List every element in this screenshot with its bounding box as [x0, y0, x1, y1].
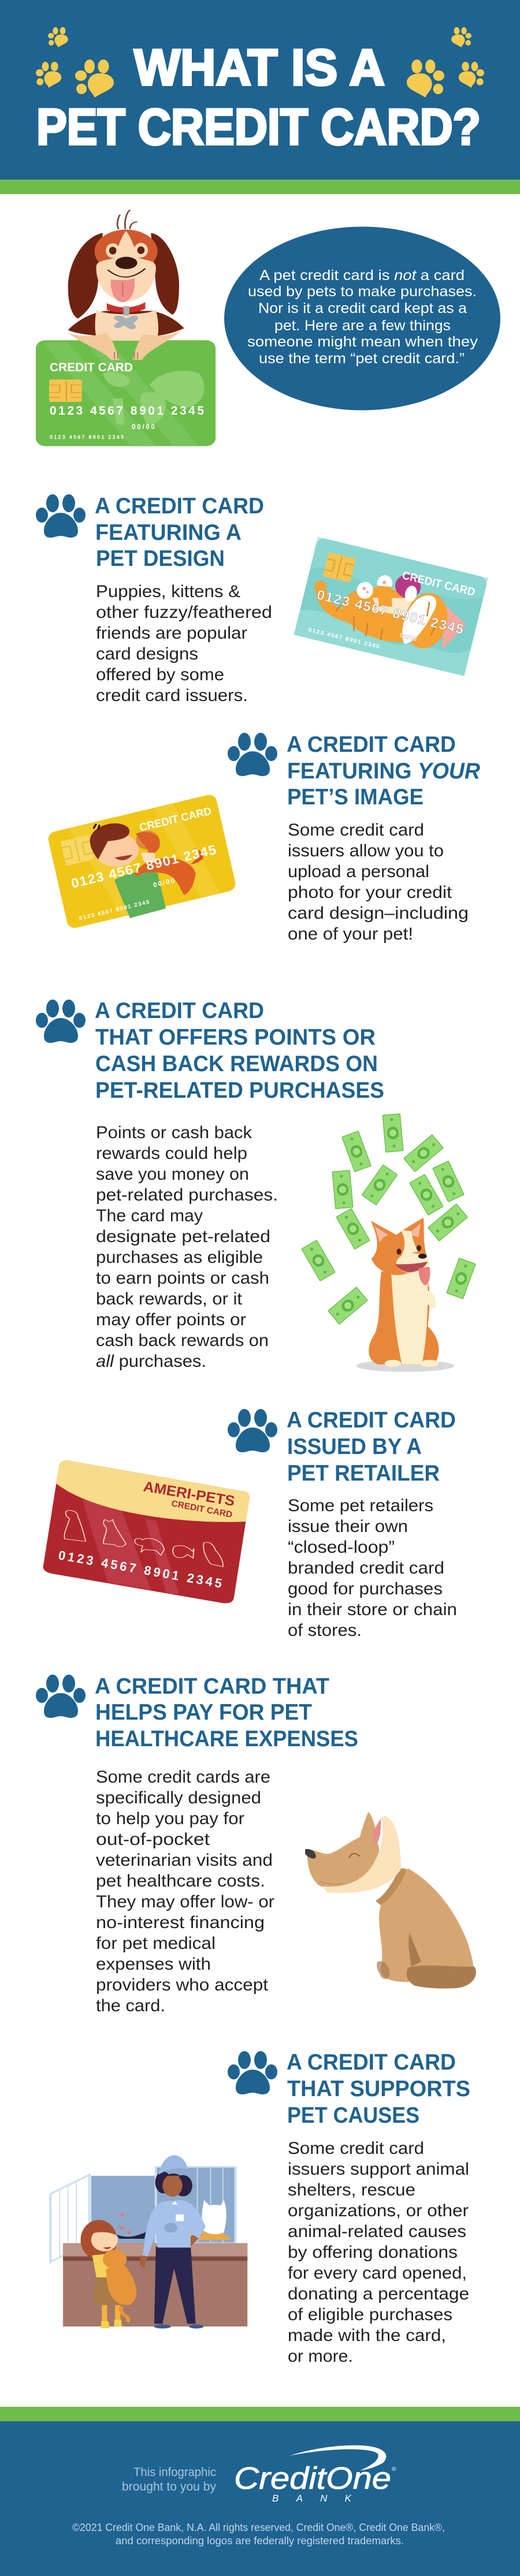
body text	[288, 821, 469, 944]
card labels: 00/00	[132, 423, 155, 431]
card labels: CREDIT CARD	[138, 805, 213, 834]
body text: Some pet retailers	[288, 1496, 433, 1515]
intro callout: A pet credit card is not a card	[259, 267, 465, 284]
body text: issue their own	[288, 1517, 408, 1536]
body text: specifically designed	[96, 1788, 261, 1807]
body text: photo for your credit	[288, 883, 452, 902]
footer: sponsor line: This infographic	[133, 2466, 216, 2479]
body text	[96, 1768, 274, 2015]
body text: all purchases.	[96, 1352, 206, 1371]
title: PET CREDIT CARD?	[36, 98, 481, 155]
heading	[95, 1674, 358, 1751]
heading: PET-RELATED PURCHASES	[95, 1078, 384, 1103]
body text: good for purchases	[288, 1579, 443, 1598]
illustration: teal cat credit card: 0123 4567 8901 2345	[307, 627, 380, 650]
title	[36, 39, 481, 155]
body text: card designs	[96, 644, 198, 663]
body text: rewards could help	[96, 1144, 247, 1163]
illustration: animal shelter	[50, 2155, 247, 2328]
card labels: CREDIT CARD	[50, 361, 133, 374]
heading: CASH BACK REWARDS ON	[95, 1052, 378, 1076]
heading	[287, 2050, 470, 2128]
card labels: 0123 4567 8901 2345	[50, 434, 124, 440]
intro callout: someone might mean when they	[247, 334, 478, 350]
body text: Points or cash back	[96, 1123, 252, 1142]
icon: yellow paws right	[407, 27, 484, 98]
intro callout: used by pets to make purchases.	[248, 284, 477, 300]
body text: Some credit card	[288, 2139, 424, 2158]
card labels: CREDIT CARD	[170, 1498, 233, 1520]
body text: branded credit card	[288, 1559, 444, 1578]
body text: made with the card,	[288, 2326, 446, 2345]
body text: credit card issuers.	[96, 686, 248, 705]
body text: in their store or chain	[288, 1600, 457, 1619]
card labels: 0123 4567 8901 2345	[79, 899, 150, 922]
card base and animal outlines	[43, 1460, 250, 1603]
body text: for every card opened,	[288, 2264, 467, 2283]
footer band	[0, 2407, 520, 2576]
beagle	[68, 210, 184, 360]
section 2: your pet's image	[47, 732, 480, 944]
heading: A CREDIT CARD	[287, 2050, 456, 2075]
illustration: falling money bills	[302, 1114, 476, 1324]
body text: pet healthcare costs.	[96, 1872, 265, 1891]
title: WHAT IS A	[134, 39, 385, 96]
body text: save you money on	[96, 1165, 249, 1184]
body text: or more.	[288, 2347, 353, 2366]
body text	[96, 582, 272, 705]
body text: out-of-pocket	[96, 1830, 210, 1849]
copyright: ©2021 Credit One Bank, N.A. All rights reserved, Credit One®, Credit One Bank®,	[72, 2522, 445, 2533]
green card	[36, 340, 216, 446]
body text	[288, 2139, 469, 2366]
body text: upload a personal	[288, 862, 429, 881]
header band	[0, 0, 520, 194]
intro callout: pet. Here are a few things	[274, 318, 451, 334]
icon: paw	[228, 2051, 277, 2094]
heading: A CREDIT CARD	[95, 998, 264, 1023]
body text: to earn points or cash	[96, 1269, 269, 1288]
logo: Credit One Bank: ®	[392, 2466, 396, 2473]
heading	[287, 1408, 456, 1486]
illustration: dog on green credit card	[36, 210, 216, 446]
card labels	[50, 361, 204, 440]
footer: sponsor line: brought to you by	[122, 2480, 216, 2493]
logo: Credit One Bank: CreditOne	[234, 2461, 391, 2496]
heading: A CREDIT CARD	[287, 732, 456, 757]
heading: PET CAUSES	[287, 2103, 419, 2128]
boy and dog	[90, 823, 203, 918]
heading: THAT SUPPORTS	[287, 2077, 470, 2101]
body text: designate pet-related	[96, 1227, 270, 1246]
icon: paw	[228, 1409, 277, 1452]
body text: of stores.	[288, 1621, 362, 1640]
heading: ISSUED BY A	[287, 1434, 422, 1459]
card labels	[61, 805, 229, 922]
icon: paw	[36, 1000, 86, 1043]
body text: veterinarian visits and	[96, 1851, 273, 1870]
heading: FEATURING YOUR	[287, 759, 480, 784]
heading: HELPS PAY FOR PET	[95, 1700, 312, 1725]
icon: paw	[36, 1675, 86, 1718]
body text: animal-related causes	[288, 2222, 466, 2241]
logo: Credit One Bank	[234, 2445, 396, 2504]
body text	[288, 1496, 457, 1640]
heading: FEATURING A	[95, 520, 242, 545]
copyright	[72, 2522, 445, 2547]
body text: one of your pet!	[288, 924, 413, 944]
heading: A CREDIT CARD	[95, 494, 264, 519]
illustration: teal cat credit card: 00/00	[399, 631, 418, 643]
illustration: teal cat credit card: 0123 4567 8901 2345	[315, 587, 465, 638]
body text: They may offer low- or	[96, 1892, 274, 1911]
heading: A CREDIT CARD	[287, 1408, 456, 1433]
body text: expenses with	[96, 1955, 211, 1974]
heading: THAT OFFERS POINTS OR	[95, 1025, 376, 1050]
body text: Some credit card	[288, 821, 424, 840]
section 5: pet healthcare	[36, 1674, 476, 2015]
card labels: 0123 4567 8901 2345	[70, 842, 217, 891]
body text: of eligible purchases	[288, 2305, 452, 2324]
heading: HEALTHCARE EXPENSES	[95, 1727, 358, 1751]
body text: shelters, rescue	[288, 2180, 415, 2200]
body text: other fuzzy/feathered	[96, 603, 272, 622]
copyright: and corresponding logos are federally registered trademarks.	[116, 2535, 404, 2547]
section 3: points or cash back	[36, 998, 476, 1372]
body text: by offering donations	[288, 2243, 458, 2262]
body text: providers who accept	[96, 1975, 269, 1995]
heading	[287, 732, 480, 810]
body text: friends are popular	[96, 624, 247, 643]
illustration: yellow credit card with boy and dog	[47, 793, 237, 930]
body text: The card may	[96, 1206, 203, 1225]
section 4: pet retailer	[43, 1408, 457, 1640]
section 1: pet design	[36, 494, 488, 705]
illustration: teal cat credit card	[294, 537, 488, 676]
intro callout: use the term “pet credit card.”	[259, 351, 465, 367]
body text: back rewards, or it	[96, 1289, 243, 1308]
icon: yellow paws left	[36, 27, 114, 98]
body text: for pet medical	[96, 1934, 216, 1953]
section 6: pet causes	[50, 2050, 470, 2366]
heading: A CREDIT CARD THAT	[95, 1674, 329, 1699]
card base	[47, 793, 237, 930]
illustration: teal cat credit card: CREDIT CARD	[401, 569, 477, 599]
body text: may offer points or	[96, 1310, 246, 1329]
body text: issuers allow you to	[288, 841, 444, 860]
heading	[95, 998, 384, 1103]
card labels: AMERI-PETS	[142, 1478, 236, 1509]
intro callout: Nor is it a credit card kept as a	[258, 300, 467, 316]
heading	[95, 494, 264, 571]
card labels: 0123 4567 8901 2345	[50, 404, 204, 417]
heading: PET DESIGN	[96, 546, 225, 571]
body text: no-interest financing	[96, 1913, 265, 1932]
heading: PET’S IMAGE	[287, 785, 424, 810]
body text: offered by some	[96, 665, 224, 684]
body text: donating a percentage	[288, 2284, 469, 2303]
body text: the card.	[96, 1996, 165, 2015]
icon: paw	[36, 494, 86, 538]
body text: Some credit cards are	[96, 1768, 270, 1787]
body text: to help you pay for	[96, 1809, 244, 1828]
body text: card design–including	[288, 904, 469, 923]
body text: pet-related purchases.	[96, 1186, 278, 1205]
icon: paw	[228, 733, 277, 776]
body text: issuers support animal	[288, 2160, 469, 2179]
card labels: 00/00	[153, 877, 176, 889]
card labels: 0123 4567 8901 2345	[57, 1548, 223, 1591]
footer: sponsor line	[122, 2466, 216, 2493]
illustration: red Ameri-Pets card	[43, 1460, 250, 1603]
body text: organizations, or other	[288, 2201, 469, 2220]
body text: purchases as eligible	[96, 1248, 263, 1267]
body text: cash back rewards on	[96, 1331, 269, 1350]
body text	[96, 1123, 278, 1371]
illustration: corgi	[356, 1218, 454, 1372]
card labels	[57, 1478, 236, 1591]
illustration: dog with cone	[305, 1812, 476, 1989]
intro callout	[224, 226, 500, 410]
body text: Puppies, kittens &	[96, 582, 240, 601]
heading: PET RETAILER	[287, 1461, 440, 1486]
logo: Credit One Bank: BANK	[272, 2493, 352, 2504]
body text: “closed-loop”	[288, 1538, 395, 1557]
